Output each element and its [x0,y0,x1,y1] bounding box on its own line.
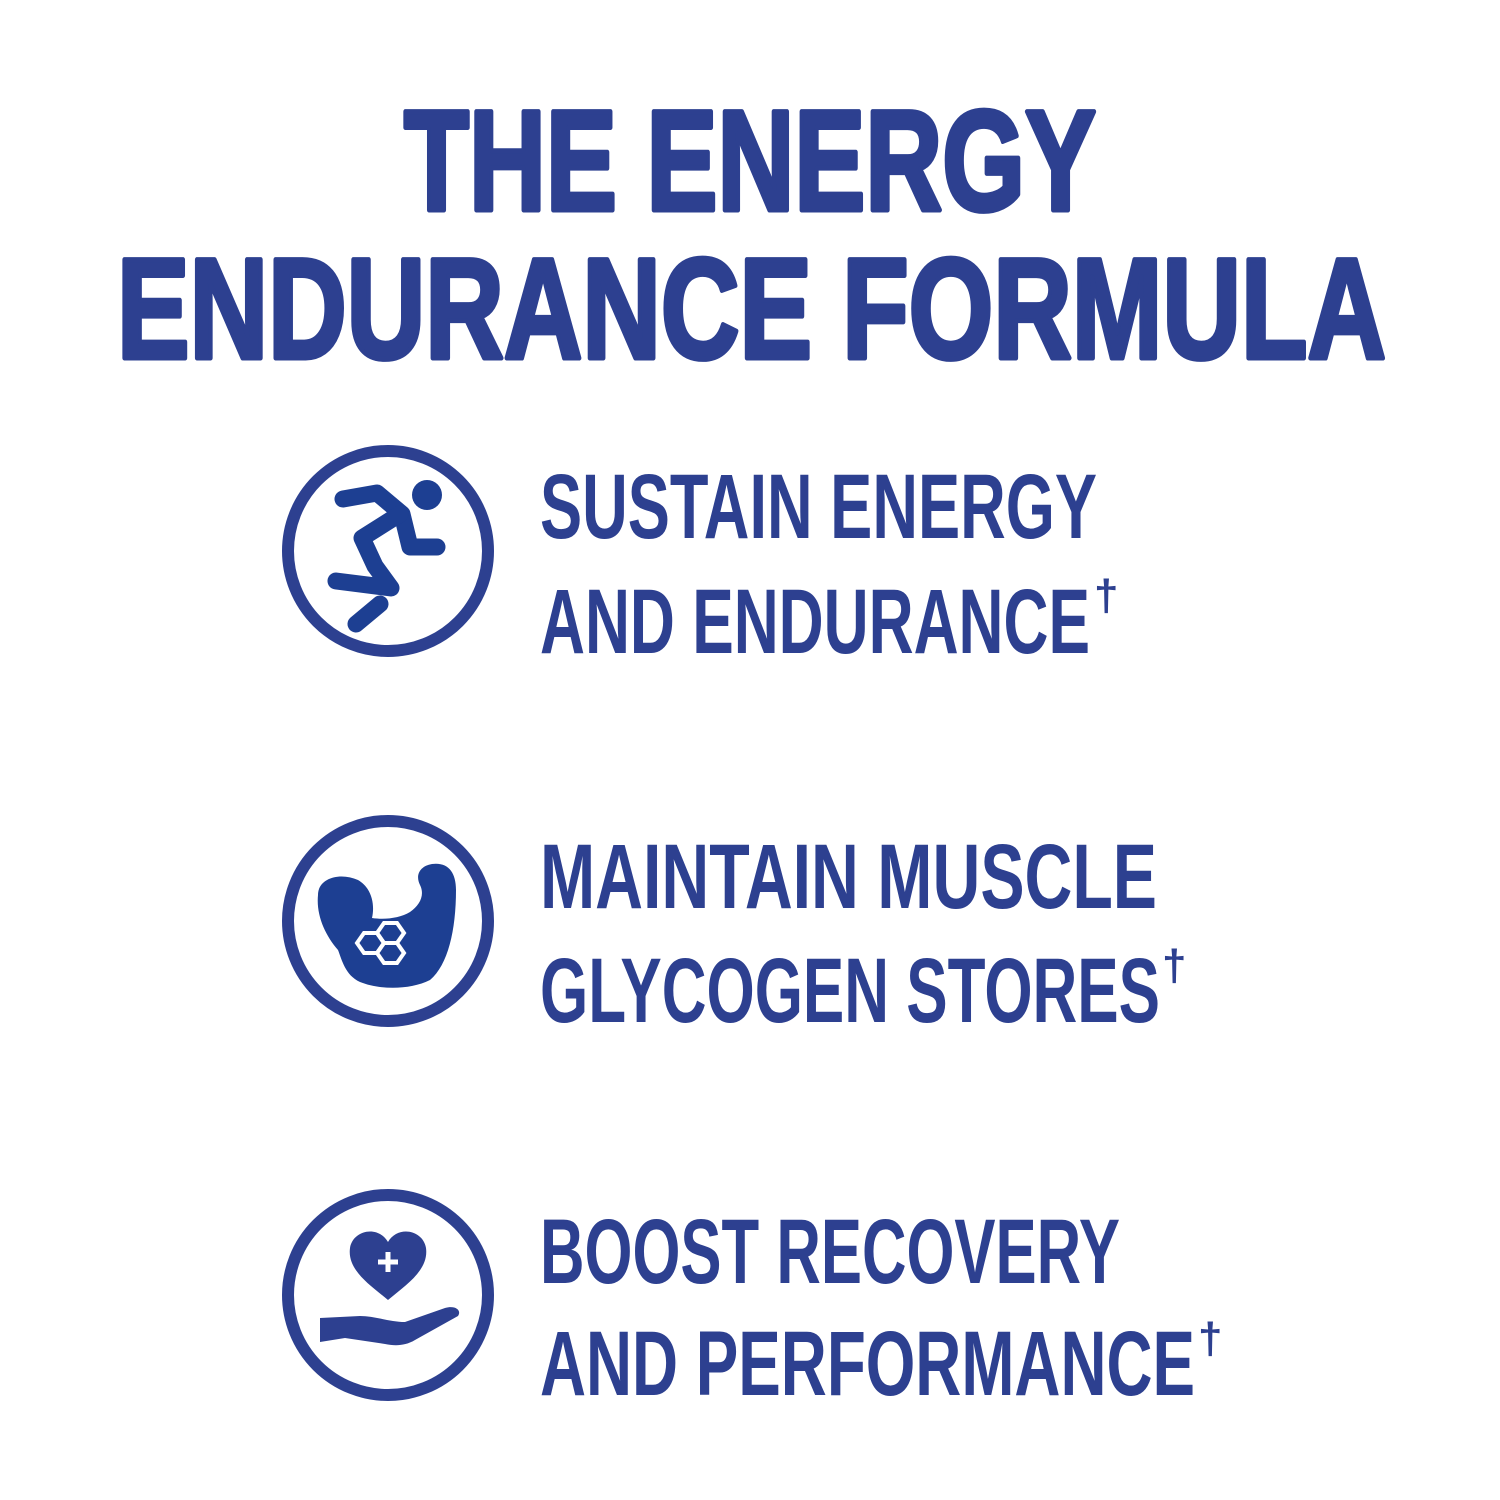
icon: runner [288,451,488,651]
text: benefit 3 [540,1201,1222,1415]
text: benefit 3: AND PERFORMANCE [540,1313,1195,1415]
text: benefit 1: AND ENDURANCE [540,571,1090,673]
icon: heart and hand [288,1195,488,1395]
text: benefit 2 [540,826,1186,1042]
text: benefit 1: † [1094,571,1118,620]
icon: muscle [288,821,488,1021]
text: benefit 2: MAINTAIN MUSCLE [540,826,1157,928]
title: THE ENERGY [404,82,1096,241]
text: benefit 3: † [1198,1314,1222,1363]
text: benefit 1 [540,456,1118,673]
text: benefit 2: † [1162,941,1186,990]
text: benefit 2: GLYCOGEN STORES [540,940,1160,1042]
text: benefit 3: BOOST RECOVERY [540,1201,1120,1303]
title [117,82,1386,389]
text: benefit 1: SUSTAIN ENERGY [540,456,1097,558]
